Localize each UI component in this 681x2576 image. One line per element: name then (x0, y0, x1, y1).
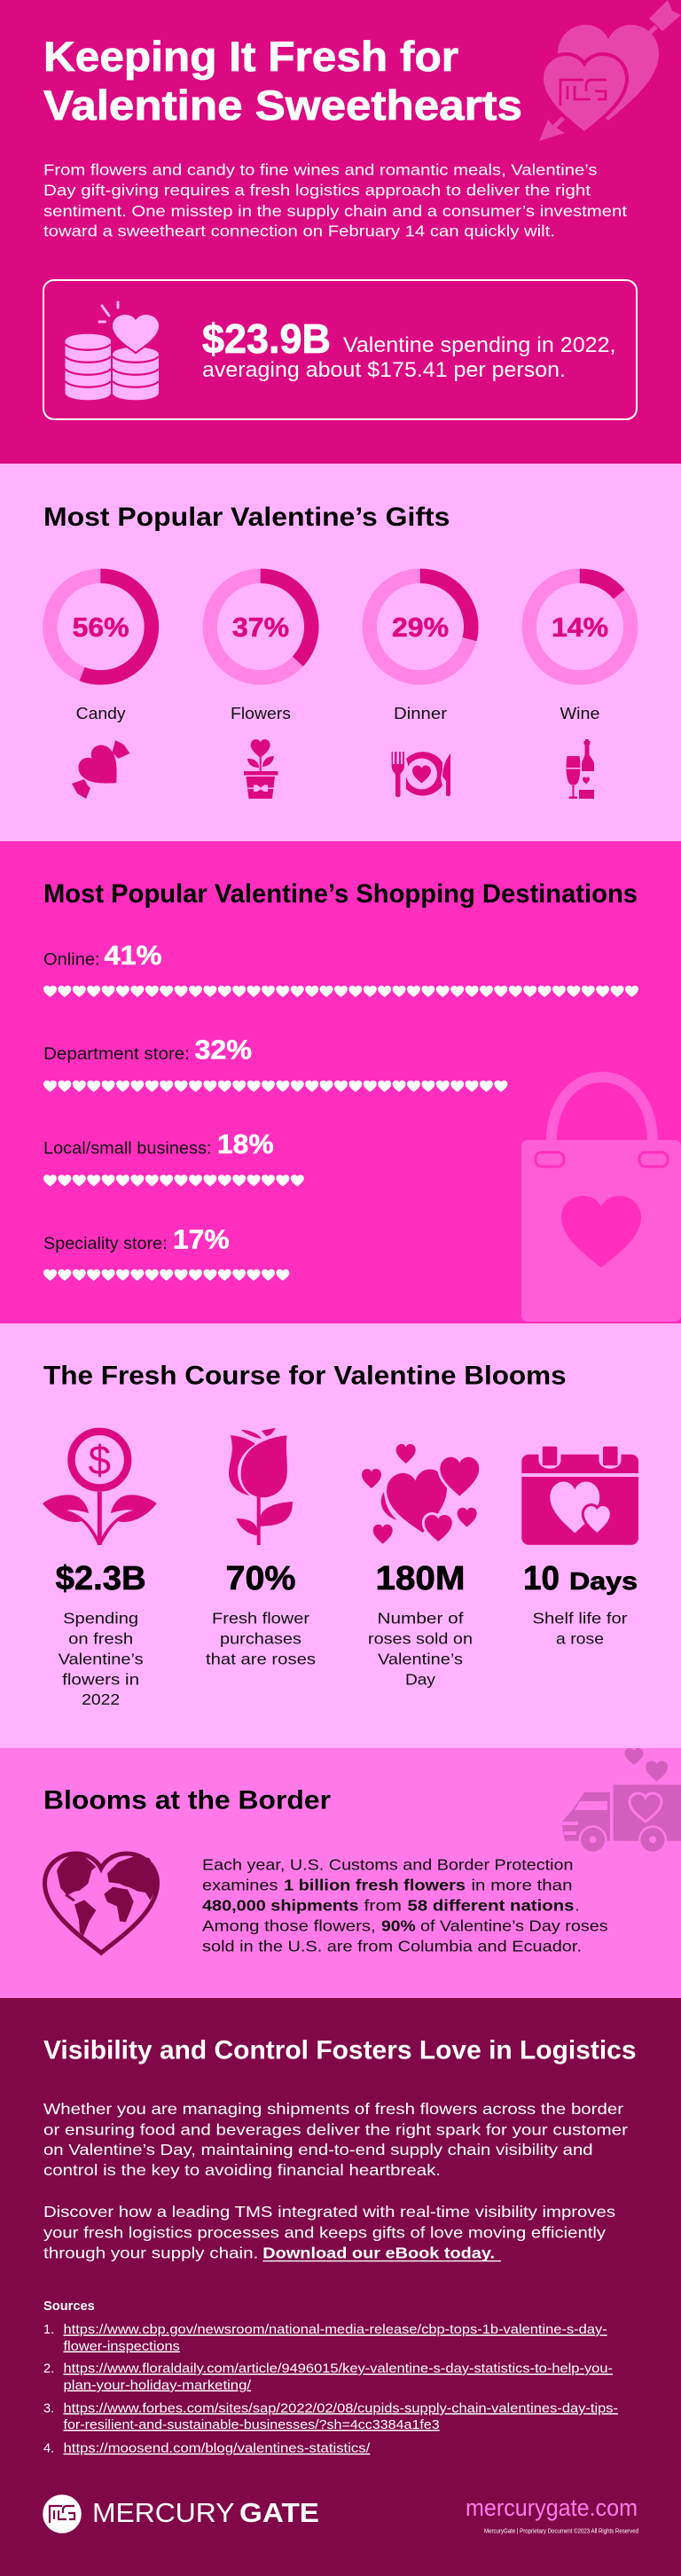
stat description: shelf life: a rose (556, 1630, 604, 1648)
panel: blooms at the border (0, 1748, 681, 1998)
heading: Most Popular Valentine’s Gifts (43, 503, 450, 532)
sources: 2. (43, 2362, 54, 2377)
icon: flower pot (244, 739, 278, 799)
row: department store 32% (43, 1034, 507, 1092)
text: paragraph two with call to action: Download our eBook today. (262, 2244, 495, 2262)
row: department store 32%: 32% (195, 1034, 252, 1066)
heading: Most Popular Valentine’s Shopping Destinations (43, 879, 638, 909)
panel: header (0, 0, 681, 464)
intro text (43, 161, 627, 240)
sources: https://moosend.com/blog/valentines-statistics/ (64, 2442, 371, 2456)
text: border inspections: 1 billion fresh flowers (284, 1877, 466, 1894)
text: paragraph one: on Valentine’s Day, maintaining end-to-end supply chain visibility and (43, 2141, 593, 2158)
title: Keeping It Fresh for (43, 33, 458, 80)
icon: delivery truck (561, 1748, 681, 1854)
row: local small business 18%: Local/small business: (43, 1138, 211, 1158)
heading: Visibility and Control Fosters Love in Logistics (43, 2036, 637, 2065)
text: paragraph one: control is the key to avoiding financial heartbreak. (43, 2161, 441, 2179)
copyright: MercuryGate | Proprietary Document ©2023 All Rights Reserved (484, 2528, 638, 2535)
text: border inspections (202, 1855, 608, 1955)
stat description: roses sold (368, 1610, 473, 1689)
logo: MercuryGate: GATE (239, 2498, 319, 2528)
sources: Sources (43, 2299, 95, 2314)
donut labels: Candy (76, 704, 126, 722)
icon: money flower: $ (89, 1437, 111, 1483)
text: border inspections: Each year, U.S. Customs and Border Protection (202, 1855, 573, 1873)
donut labels: Wine (560, 704, 599, 722)
stat description: roses share (206, 1610, 316, 1668)
intro text: Day gift-giving requires a fresh logistics approach to deliver the right (43, 182, 591, 199)
stat description: spending: on fresh (68, 1630, 133, 1648)
stat: 23.9B: $23.9B (202, 316, 331, 362)
logo: MercuryGate (43, 2494, 319, 2533)
row: local small business 18% (43, 1128, 304, 1186)
text: border inspections: sold in the U.S. are from Columbia and Ecuador. (202, 1938, 582, 1955)
donut chart: candy 56% (50, 576, 152, 677)
stat description: spending: flowers in (62, 1671, 139, 1689)
title: Valentine Sweethearts (43, 82, 522, 129)
icon: shopping bag (521, 1077, 681, 1322)
panel: fresh course blooms (0, 1323, 681, 1748)
text: paragraph two with call to action: through your supply chain. (43, 2244, 258, 2262)
stat description: roses sold: Valentine’s (378, 1651, 463, 1668)
stats numbers: 70% (225, 1560, 296, 1597)
icon: candy (72, 740, 130, 799)
row: online 41%: 41% (105, 940, 161, 971)
stats numbers (56, 1560, 638, 1597)
heading: Blooms at the Border (43, 1786, 331, 1815)
icon: rose (229, 1428, 293, 1545)
stat description: roses share: Fresh flower (212, 1610, 309, 1628)
stats numbers: Days (569, 1567, 638, 1595)
stat description: roses sold: Number of (378, 1610, 464, 1628)
panel: shopping destinations (0, 841, 681, 1324)
icon: wine and bottle (567, 739, 594, 799)
stats numbers: $2.3B (56, 1560, 146, 1597)
sources: flower-inspections (64, 2339, 180, 2354)
sources: for-resilient-and-sustainable-businesses/?sh=4cc3384a1fe3 (64, 2418, 440, 2432)
icon: globe heart (44, 1854, 159, 1953)
stat description: spending (59, 1610, 144, 1708)
website: mercurygate.com (466, 2494, 638, 2521)
title (43, 33, 522, 129)
icon: plate and cutlery (392, 752, 450, 797)
stat description: roses share: that are roses (206, 1651, 316, 1668)
stat description: shelf life: Shelf life for (532, 1610, 628, 1628)
stat description: spending: Spending (63, 1610, 138, 1628)
text: border inspections: . (575, 1897, 579, 1915)
row: online 41% (43, 940, 638, 997)
stat description: spending: 2022 (82, 1690, 120, 1708)
text: paragraph one: or ensuring food and beverages deliver the right spark for your customer (43, 2120, 628, 2138)
text: border inspections: of Valentine’s Day roses (420, 1917, 608, 1935)
icon: calendar (521, 1447, 638, 1545)
text: border inspections: in more than (472, 1877, 573, 1894)
text: border inspections: from (364, 1897, 402, 1915)
donut chart: flowers 37%: 37% (232, 612, 289, 643)
stat description (202, 333, 615, 382)
donut chart: dinner 29% (370, 576, 471, 677)
donut chart: dinner 29%: 29% (392, 612, 449, 643)
logo: MercuryGate: MERCURY (92, 2498, 234, 2528)
stats numbers: 10 (523, 1560, 560, 1597)
donut chart: flowers 37% (210, 576, 311, 677)
sources: https://www.cbp.gov/newsroom/national-media-release/cbp-tops-1b-valentine-s-day- (64, 2323, 607, 2338)
stat description: Valentine spending in 2022, (343, 333, 615, 357)
text: border inspections: 480,000 shipments (202, 1897, 359, 1915)
stat description: roses sold: Day (405, 1671, 435, 1689)
sources: plan-your-holiday-marketing/ (64, 2378, 252, 2393)
row: speciality store 17% (43, 1223, 289, 1281)
intro text: sentiment. One misstep in the supply chain and a consumer’s investment (43, 202, 627, 220)
sources (43, 2299, 618, 2456)
intro text: toward a sweetheart connection on February 14 can quickly wilt. (43, 222, 555, 240)
text: paragraph two with call to action: your fresh logistics processes and keeps gifts of love moving efficiently (43, 2223, 606, 2241)
icon: hearts with arrow and logo (539, 0, 681, 141)
row: local small business 18%: 18% (217, 1128, 274, 1159)
text: border inspections: examines (202, 1877, 278, 1894)
sources: 3. (43, 2401, 54, 2416)
sources: https://www.forbes.com/sites/sap/2022/02/08/cupids-supply-chain-valentines-day-tips- (64, 2401, 618, 2416)
stat description: roses share: purchases (220, 1630, 301, 1648)
text: border inspections: Among those flowers, (202, 1917, 376, 1935)
text: paragraph one: Whether you are managing shipments of fresh flowers across the border (43, 2100, 623, 2118)
stats numbers: 180M (376, 1560, 465, 1597)
row: online 41%: Online: (43, 950, 100, 970)
donut chart: wine 14%: 14% (552, 612, 608, 643)
text: paragraph two with call to action (43, 2203, 615, 2262)
donut labels (76, 704, 600, 722)
text: border inspections: 58 different nations (408, 1897, 575, 1915)
stat description: shelf life (532, 1610, 628, 1648)
sources: 4. (43, 2442, 54, 2456)
icon: many hearts (362, 1444, 479, 1544)
text: border inspections: 90% (381, 1917, 416, 1935)
icon: coins and heart (66, 302, 159, 400)
text: paragraph two with call to action: Discover how a leading TMS integrated with real-time visibility improves (43, 2203, 615, 2221)
intro text: From flowers and candy to fine wines and romantic meals, Valentine’s (43, 161, 598, 179)
panel: most popular gifts (0, 464, 681, 841)
donut labels: Dinner (394, 704, 447, 722)
heading: The Fresh Course for Valentine Blooms (43, 1362, 567, 1391)
panel: visibility and control (0, 1998, 681, 2576)
stat description: spending: Valentine’s (59, 1651, 144, 1668)
row: speciality store 17%: Speciality store: (43, 1234, 168, 1253)
stat description: averaging about $175.41 per person. (202, 358, 566, 382)
icon: money flower (43, 1432, 157, 1545)
donut labels: Flowers (231, 704, 291, 722)
sources: 1. (43, 2323, 54, 2338)
stat description: roses sold: roses sold on (368, 1630, 473, 1648)
text: paragraph one (43, 2100, 628, 2179)
donut chart: candy 56%: 56% (73, 612, 129, 643)
callout: spending (43, 280, 637, 419)
row: department store 32%: Department store: (43, 1044, 190, 1064)
donut chart: wine 14% (529, 576, 630, 677)
row: speciality store 17%: 17% (173, 1223, 230, 1255)
sources: https://www.floraldaily.com/article/9496015/key-valentine-s-day-statistics-to-help-you- (64, 2362, 613, 2377)
